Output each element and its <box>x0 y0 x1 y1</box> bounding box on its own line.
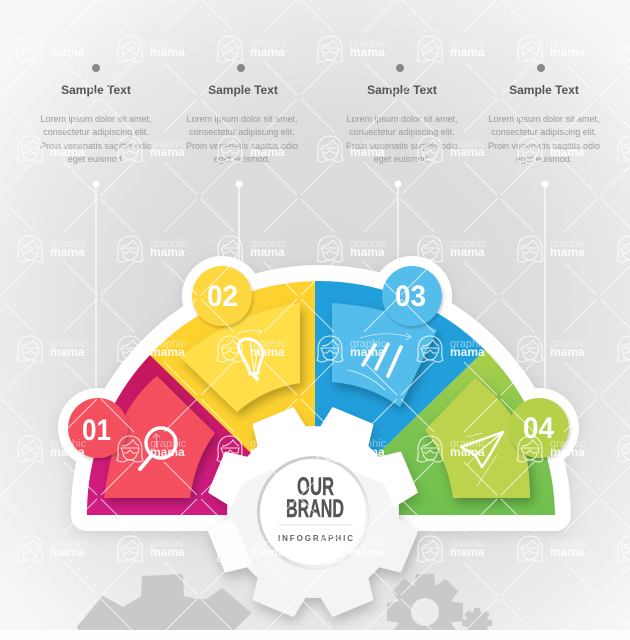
column 1 text: Sample Text <box>61 83 131 97</box>
column 1 text <box>40 64 152 164</box>
icon: magnifier <box>140 428 176 469</box>
column 3 text: eget euismod. <box>374 154 430 164</box>
column 3 text: consectetur adipiscing elit. <box>349 127 455 137</box>
connector lines <box>92 180 548 395</box>
column 4 text: Lorem ipsum dolor sit amet, <box>488 114 600 124</box>
panel 04 <box>425 378 530 498</box>
gear hub <box>258 458 370 570</box>
column 1 text: eget euismod. <box>68 154 124 164</box>
brand subtitle: INFOGRAPHIC <box>278 534 353 543</box>
panel 02 <box>180 303 300 412</box>
badge 03: 03 <box>395 280 426 313</box>
badge 01 <box>68 398 128 458</box>
column 2 text: consectetur adipiscing elit. <box>189 127 295 137</box>
panel 01 <box>104 376 215 498</box>
column 4 text: eget euismod. <box>516 154 572 164</box>
badge 04 <box>509 398 569 458</box>
badge 02 <box>192 266 252 326</box>
column 4 text: consectetur adipiscing elit. <box>491 127 597 137</box>
badge 01: 01 <box>82 414 111 447</box>
badge 04: 04 <box>523 412 554 445</box>
column 2 text: Lorem ipsum dolor sit amet, <box>186 114 298 124</box>
brand title: BRAND <box>286 495 344 523</box>
central gear <box>208 407 418 617</box>
column 3 text: Lorem ipsum dolor sit amet, <box>346 114 458 124</box>
medium and small grey gears <box>387 574 492 630</box>
icon: paper plane <box>461 432 503 486</box>
badge 02: 02 <box>207 280 238 313</box>
segment 01 <box>87 355 315 515</box>
segment 03 <box>315 281 485 515</box>
column 1 text: Proin venenatis sagittis odio <box>40 141 152 151</box>
segment 02 <box>150 281 315 515</box>
column 4 text <box>488 64 600 164</box>
icon: strokes <box>348 333 411 390</box>
column 1 text: Lorem ipsum dolor sit amet, <box>40 114 152 124</box>
brand title: OUR <box>297 473 334 501</box>
column 2 text: Sample Text <box>208 83 278 97</box>
brand title <box>286 473 344 523</box>
icon: light bulb <box>236 329 263 379</box>
column 2 text: Proin venenatis sagittis odio <box>186 141 298 151</box>
column 3 text: Sample Text <box>367 83 437 97</box>
segment 04 <box>315 350 555 515</box>
panel 03 <box>332 303 437 407</box>
badge 03 <box>382 266 442 326</box>
white semicircle backing <box>58 256 579 515</box>
column 2 text <box>186 64 298 164</box>
column 1 text: consectetur adipiscing elit. <box>43 127 149 137</box>
column 4 text: Proin venenatis sagittis odio <box>488 141 600 151</box>
column 2 text: eget euismod. <box>214 154 270 164</box>
large grey gear silhouette <box>78 575 250 630</box>
column 3 text: Proin venenatis sagittis odio <box>346 141 458 151</box>
column 3 text <box>346 64 458 164</box>
column 4 text: Sample Text <box>509 83 579 97</box>
